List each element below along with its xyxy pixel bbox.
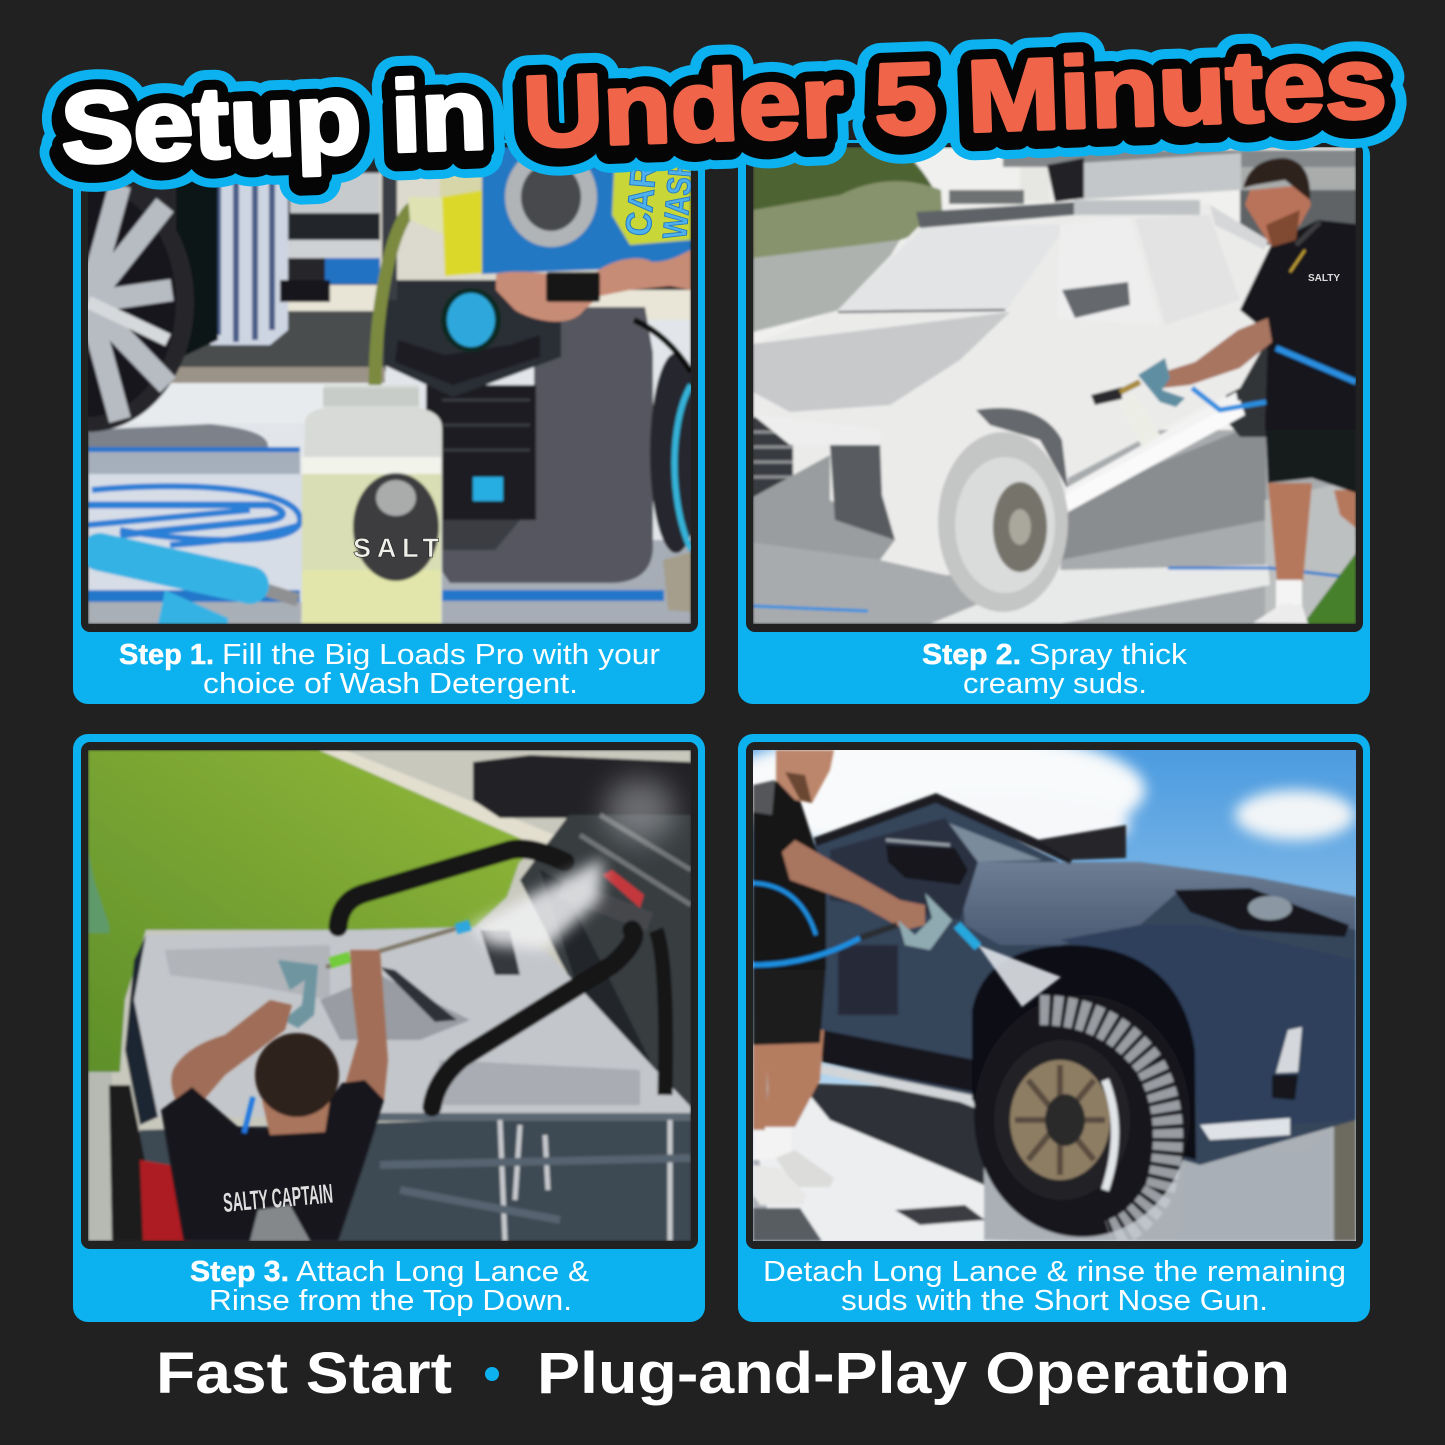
photo: foaming the truck bbox=[753, 147, 1356, 624]
photo: rinsing with long lance bbox=[88, 750, 691, 1241]
title outer blue outline bbox=[57, 27, 1389, 192]
shirt logo: SALTY CAPTAIN bbox=[222, 1179, 334, 1218]
panel: step 3 bbox=[73, 734, 705, 1322]
step 3 caption: Rinse from the Top Down. bbox=[209, 1285, 572, 1317]
man bbox=[765, 1030, 824, 1127]
hose bbox=[753, 883, 816, 935]
footer tagline bbox=[156, 1341, 1290, 1406]
WASH: WASH bbox=[656, 156, 701, 241]
panel: step 1 bbox=[73, 140, 705, 704]
photo border bbox=[81, 742, 698, 1249]
step 3 caption: Step 3. bbox=[190, 1256, 289, 1288]
photo border bbox=[746, 742, 1363, 1249]
logo text on bottle: SALT bbox=[353, 533, 440, 563]
washer background bbox=[378, 170, 598, 282]
step 4 caption bbox=[763, 1256, 1346, 1317]
tagline separator dot bbox=[485, 1367, 499, 1381]
step 1 caption: Step 1. bbox=[119, 639, 214, 671]
photo border bbox=[81, 143, 698, 632]
step 2 caption: Spray thick bbox=[1029, 639, 1188, 671]
photo border bbox=[746, 143, 1363, 632]
title black outline bbox=[56, 27, 1389, 193]
photo: filling the bottle bbox=[88, 147, 691, 624]
step 2 caption: Step 2. bbox=[922, 639, 1021, 671]
title black outline: Setup in bbox=[57, 66, 486, 193]
panel frame bbox=[738, 140, 1370, 704]
title black outline: Setup in bbox=[59, 58, 489, 185]
title outer blue outline: Setup in bbox=[59, 58, 489, 185]
title black outline: Under 5 Minutes bbox=[521, 27, 1388, 169]
step 1 caption: choice of Wash Detergent. bbox=[203, 668, 578, 700]
panel: step 4 bbox=[715, 728, 1370, 1322]
step 2 caption bbox=[922, 639, 1188, 700]
panel: step 2 bbox=[738, 140, 1370, 704]
step 1 caption: Fill the Big Loads Pro with your bbox=[222, 639, 660, 671]
detergent bag label bbox=[626, 168, 691, 238]
step 1 caption bbox=[119, 639, 660, 700]
ground bbox=[753, 1126, 1335, 1241]
truck bbox=[815, 800, 1356, 1165]
step 2 caption: creamy suds. bbox=[963, 668, 1147, 700]
shirt logo: SALTY bbox=[1308, 273, 1340, 284]
clouds bbox=[753, 750, 1356, 860]
step 3 caption bbox=[190, 1256, 589, 1317]
title white words: Setup in bbox=[59, 58, 489, 185]
tagline left: Fast Start bbox=[156, 1341, 452, 1406]
title orange words: Under 5 Minutes bbox=[521, 27, 1388, 169]
step 4 caption: suds with the Short Nose Gun. bbox=[841, 1285, 1268, 1317]
photo: rinsing with short gun bbox=[715, 728, 1356, 1241]
step 4 caption: Detach Long Lance & rinse the remaining bbox=[763, 1256, 1346, 1288]
tagline right: Plug-and-Play Operation bbox=[537, 1341, 1290, 1406]
title outer blue outline: Under 5 Minutes bbox=[519, 34, 1387, 176]
water spray bbox=[978, 945, 1061, 1007]
title black outline: Under 5 Minutes bbox=[518, 35, 1386, 177]
step 3 caption: Attach Long Lance & bbox=[296, 1256, 589, 1288]
panel frame bbox=[73, 140, 705, 704]
title bbox=[56, 27, 1389, 193]
CAR: CAR bbox=[617, 162, 664, 238]
spray mist bbox=[605, 778, 675, 842]
water spray bbox=[469, 858, 603, 950]
panel frame bbox=[738, 734, 1370, 1322]
panel frame bbox=[73, 734, 705, 1322]
title outer blue outline: Under 5 Minutes bbox=[521, 27, 1388, 169]
title outer blue outline: Setup in bbox=[57, 65, 487, 192]
